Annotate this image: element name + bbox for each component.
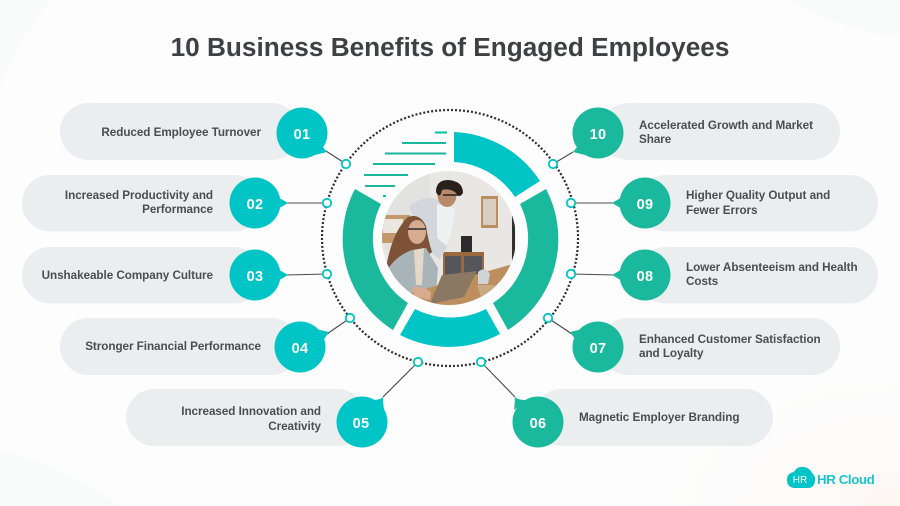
wall frame xyxy=(481,196,498,228)
item 02 xyxy=(22,175,331,232)
item 08: Costs xyxy=(686,275,719,288)
item 06: Magnetic Employer Branding xyxy=(579,411,739,424)
item 03 xyxy=(22,247,331,304)
item 07 xyxy=(544,314,840,375)
item 07: 07 xyxy=(590,341,606,357)
item 02: 02 xyxy=(247,197,263,213)
item 10: Share xyxy=(639,133,672,146)
item 09: Higher Quality Output and xyxy=(686,189,830,202)
item 09: Fewer Errors xyxy=(686,204,758,217)
title: 10 Business Benefits of Engaged Employees xyxy=(171,32,729,62)
item 06: 06 xyxy=(530,416,546,432)
item 01: Reduced Employee Turnover xyxy=(101,126,261,139)
dotted ring xyxy=(322,110,578,366)
item 07: and Loyalty xyxy=(639,347,704,360)
item 02: Increased Productivity and xyxy=(65,189,213,202)
item 04 xyxy=(60,314,354,375)
item 01: 01 xyxy=(294,127,310,143)
item 05 xyxy=(126,358,422,448)
logo: HR Cloud: HR xyxy=(793,475,807,486)
shelf xyxy=(443,252,484,275)
item 08: 08 xyxy=(637,269,653,285)
photo: two colleagues at a desk xyxy=(380,170,520,310)
item 05: Increased Innovation and xyxy=(181,405,321,418)
man xyxy=(409,198,455,260)
pinboard left xyxy=(380,215,410,243)
item 08 xyxy=(567,247,878,304)
item 01 xyxy=(60,103,350,168)
item 08: Lower Absenteeism and Health xyxy=(686,261,858,274)
item 03: 03 xyxy=(247,269,263,285)
item 05: 05 xyxy=(353,416,369,432)
item 10: Accelerated Growth and Market xyxy=(639,119,813,132)
logo: HR Cloud xyxy=(787,467,875,488)
item 02: Performance xyxy=(142,203,214,216)
item 04: 04 xyxy=(292,341,308,357)
donut chart xyxy=(343,132,558,347)
item 03: Unshakeable Company Culture xyxy=(42,269,214,282)
item 10: 10 xyxy=(590,127,606,143)
hatched segment xyxy=(364,132,447,196)
desk and laptop xyxy=(410,264,510,305)
item 07: Enhanced Customer Satisfaction xyxy=(639,333,821,346)
item 10 xyxy=(549,103,840,168)
item 09: 09 xyxy=(637,197,653,213)
item 09 xyxy=(567,175,878,232)
item 05: Creativity xyxy=(268,420,322,433)
item 04: Stronger Financial Performance xyxy=(85,340,262,353)
item 06 xyxy=(477,358,773,448)
woman xyxy=(386,216,432,268)
logo: HR Cloud: HR Cloud xyxy=(817,472,875,487)
